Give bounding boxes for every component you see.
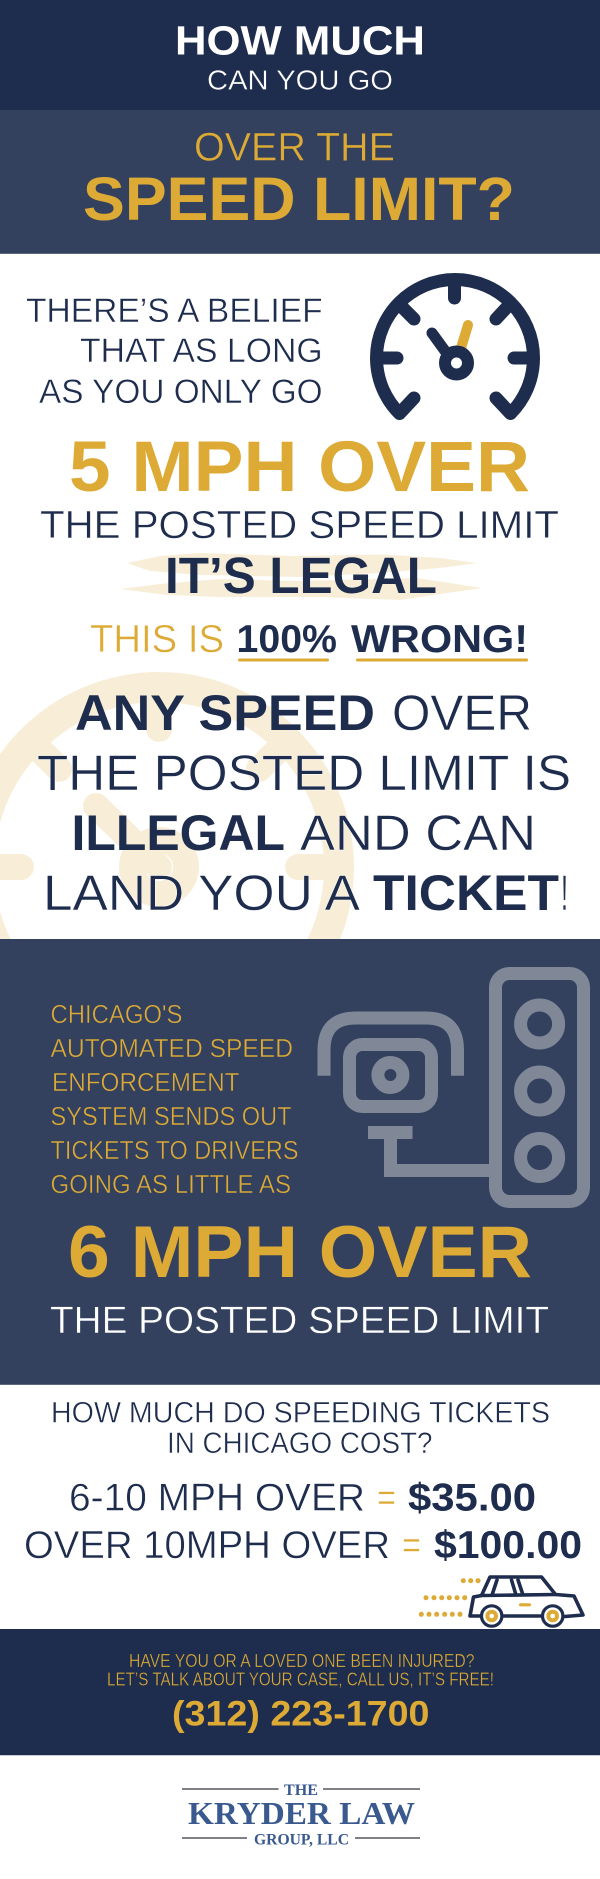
- callout: this is 100% wrong: [90, 618, 528, 662]
- panel: ticket costs: [0, 1385, 600, 1629]
- text block: automated enforcement description: TICKETS TO DRIVERS: [50, 1137, 298, 1165]
- cost row: 6-10 mph: [69, 1477, 536, 1520]
- callout: this is 100% wrong: THIS IS: [90, 618, 224, 661]
- text: the posted speed limit: THE POSTED SPEED LIMIT: [40, 504, 559, 547]
- text block: belief intro: THERE’S A BELIEF: [26, 292, 323, 330]
- subheading: over the: OVER THE: [194, 126, 395, 170]
- text block: automated enforcement description: CHICAGO'S: [50, 1001, 182, 1029]
- heading: how much do tickets cost: HOW MUCH DO SPEEDING TICKETS: [51, 1397, 550, 1430]
- logo: the kryder law group: [0, 1755, 600, 1848]
- text block: any speed over the limit is illegal: ILLEGAL: [72, 805, 285, 861]
- text block: any speed over the limit is illegal: !: [561, 865, 568, 921]
- panel: white belief section: [0, 254, 600, 939]
- logo: the kryder law group: THE: [284, 1782, 318, 1799]
- callout: it's legal with brush highlight: IT’S LEGAL: [165, 547, 437, 604]
- panel: call to action: [0, 1629, 600, 1755]
- icon: speeding car: [419, 1577, 583, 1626]
- panel: chicago automated enforcement: [0, 939, 600, 1386]
- panel: title top band: [0, 0, 600, 110]
- text block: any speed over the limit is illegal: ANY SPEED: [75, 685, 375, 741]
- cost row: over 10 mph: $100.00: [434, 1524, 582, 1567]
- text block: have you been injured: LET’S TALK ABOUT YOUR CASE, CALL US, IT’S FREE!: [107, 1670, 494, 1690]
- cost row: over 10 mph: OVER 10MPH OVER: [24, 1524, 390, 1567]
- text block: any speed over the limit is illegal: OVER: [392, 685, 532, 741]
- cost row: 6-10 mph: =: [377, 1477, 396, 1520]
- callout: this is 100% wrong: 100%: [236, 618, 337, 661]
- text block: any speed over the limit is illegal: TICKET: [373, 865, 559, 921]
- cost row: over 10 mph: [24, 1524, 582, 1567]
- callout: this is 100% wrong: WRONG!: [351, 618, 528, 661]
- text block: automated enforcement description: GOING AS LITTLE AS: [50, 1171, 291, 1199]
- cost row: over 10 mph: =: [402, 1524, 421, 1567]
- icon: speedometer: [376, 279, 534, 414]
- heading: how much: HOW MUCH: [175, 17, 425, 63]
- cost row: 6-10 mph: $35.00: [408, 1477, 536, 1520]
- logo: the kryder law group: KRYDER LAW: [188, 1795, 415, 1831]
- text block: have you been injured: HAVE YOU OR A LOVED ONE BEEN INJURED?: [129, 1651, 474, 1671]
- text block: any speed over the limit is illegal: [37, 685, 571, 921]
- cost row: 6-10 mph: 6-10 MPH OVER: [69, 1477, 365, 1520]
- callout: 6 mph over: 6 MPH OVER: [68, 1212, 532, 1293]
- text block: belief intro: AS YOU ONLY GO: [39, 373, 323, 411]
- text block: automated enforcement description: [50, 1001, 298, 1199]
- logo: the kryder law group: GROUP, LLC: [254, 1832, 349, 1848]
- text block: automated enforcement description: ENFORCEMENT: [52, 1069, 240, 1097]
- subheading: can you go: CAN YOU GO: [207, 64, 393, 96]
- panel: title second band: [0, 110, 600, 254]
- heading: how much do tickets cost: [51, 1397, 550, 1460]
- phone number: (312) 223-1700: [172, 1695, 430, 1734]
- callout: 5 mph over: 5 MPH OVER: [69, 428, 530, 507]
- text block: have you been injured: [107, 1651, 494, 1690]
- text block: any speed over the limit is illegal: THE POSTED LIMIT IS: [37, 745, 571, 801]
- text block: automated enforcement description: AUTOMATED SPEED: [50, 1035, 293, 1063]
- text block: belief intro: THAT AS LONG: [80, 332, 323, 370]
- heading: how much do tickets cost: IN CHICAGO COST?: [167, 1427, 432, 1460]
- heading: speed limit: SPEED LIMIT?: [83, 165, 515, 233]
- icon: faint background speedometer: [0, 672, 354, 939]
- text: the posted speed limit: THE POSTED SPEED LIMIT: [50, 1300, 549, 1342]
- text block: belief intro: [26, 292, 323, 411]
- text block: automated enforcement description: SYSTEM SENDS OUT: [50, 1103, 292, 1131]
- text block: any speed over the limit is illegal: LAND YOU A: [43, 865, 361, 921]
- text block: any speed over the limit is illegal: AND CAN: [300, 805, 536, 861]
- icon: speed camera on traffic light: [324, 974, 584, 1202]
